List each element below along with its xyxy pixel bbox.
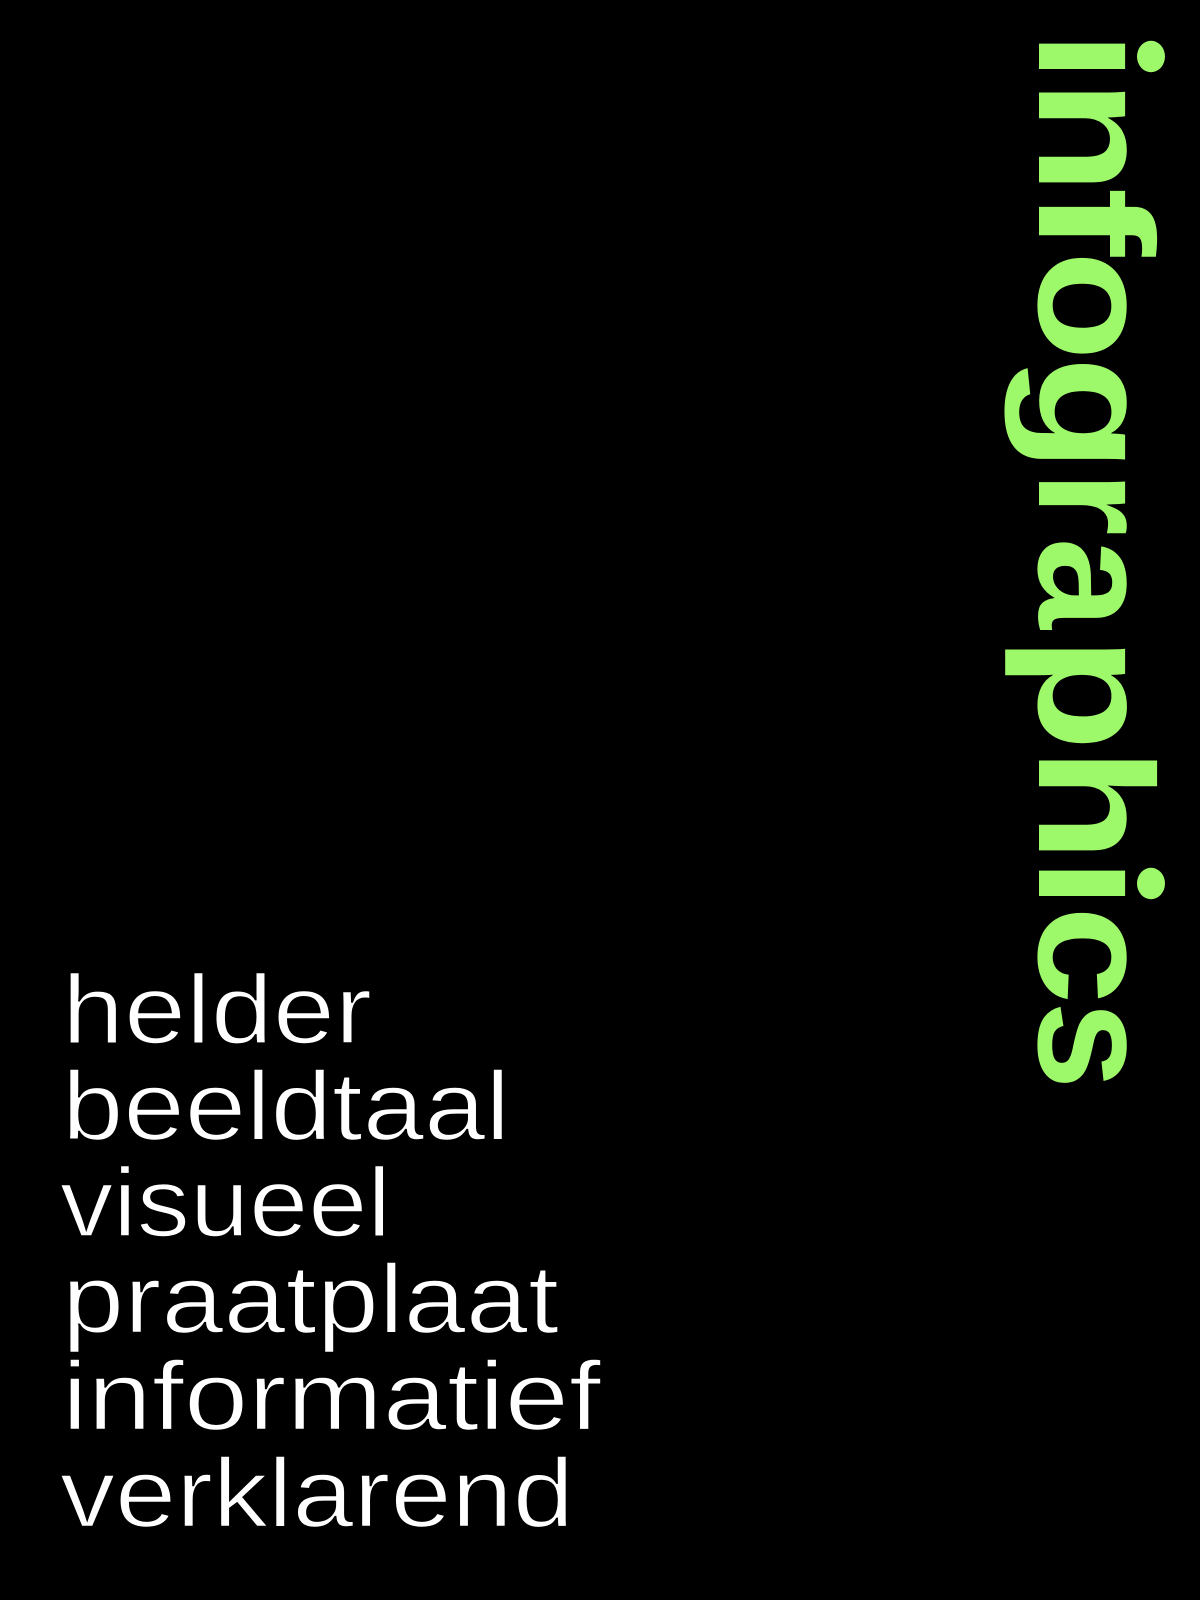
title: infographics (vertical) [1004,31,1187,1089]
word list [60,955,602,1548]
word: helder: helder [62,955,372,1064]
word: praatplaat: praatplaat [62,1245,559,1354]
title: infographics (vertical): p [1004,636,1187,751]
word: verklarend: verklarend [60,1439,574,1548]
title: infographics (vertical): c [1004,906,1187,1004]
title: infographics (vertical): i [1004,31,1187,82]
title: infographics (vertical): s [1004,1001,1187,1089]
title: infographics (vertical): i [1004,858,1187,909]
word: informatief: informatief [62,1342,602,1451]
title: infographics (vertical): n [1004,79,1187,194]
title: infographics (vertical): a [1004,538,1187,630]
title: infographics (vertical): h [1004,747,1187,862]
icon: round dot of first i [1133,38,1169,76]
title: infographics (vertical): g [1004,356,1187,472]
title: infographics (vertical): f [1004,187,1187,257]
title: infographics (vertical): o [1004,251,1187,361]
title: infographics (vertical): r [1004,470,1187,536]
icon: round dot of second i [1133,864,1169,902]
word: visueel: visueel [60,1148,391,1257]
word: beeldtaal: beeldtaal [62,1052,510,1160]
